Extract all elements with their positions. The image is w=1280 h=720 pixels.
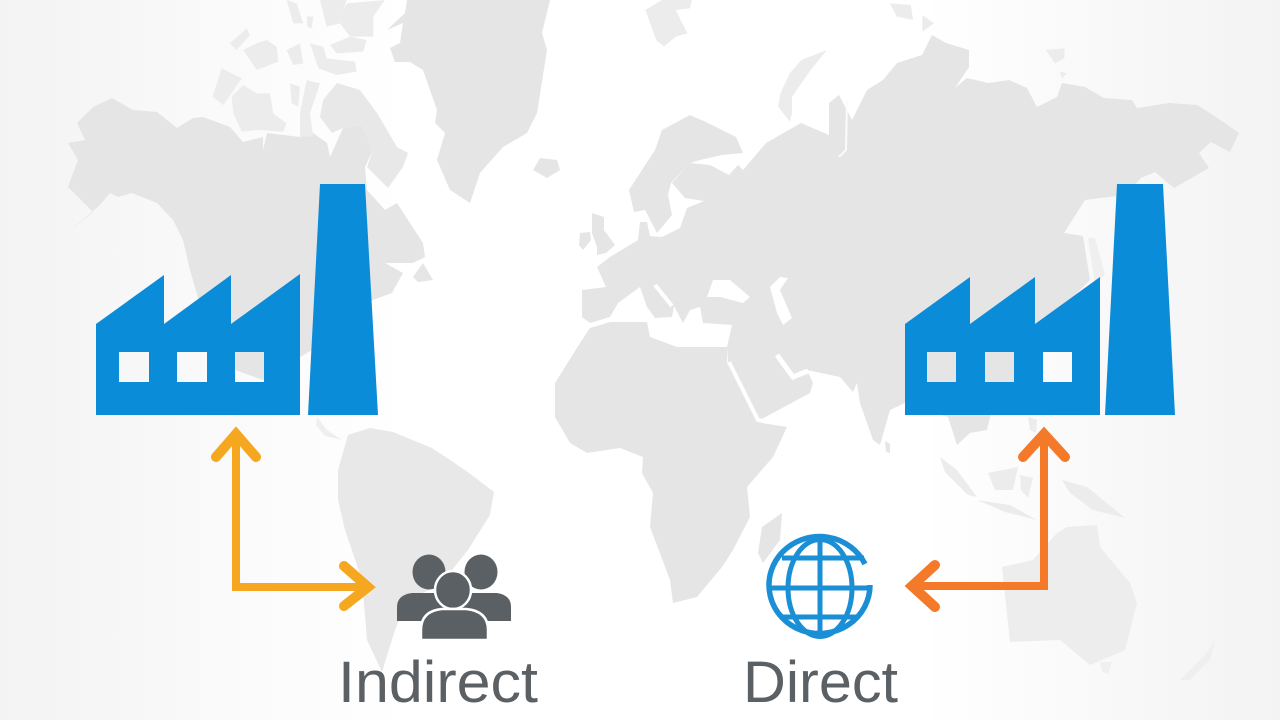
Svalbard and Arctic Russia islands bbox=[645, 0, 1067, 122]
Australia bbox=[1002, 525, 1137, 665]
Madagascar bbox=[758, 513, 782, 563]
Tasmania bbox=[1100, 662, 1112, 674]
South America bbox=[338, 428, 494, 672]
Japan bbox=[1088, 238, 1105, 285]
Newfoundland bbox=[413, 263, 433, 282]
Greenland bbox=[387, 0, 550, 203]
left factory bbox=[96, 184, 378, 415]
label: Direct: Direct bbox=[743, 650, 898, 715]
New Zealand bbox=[1180, 640, 1215, 680]
Southeast Asia islands bbox=[940, 417, 1125, 520]
Scandinavia bbox=[629, 115, 743, 233]
Red Sea bbox=[729, 362, 785, 424]
icon: people bbox=[397, 554, 511, 640]
factory building bbox=[905, 277, 1100, 415]
Central America bbox=[316, 417, 342, 440]
label: Indirect: Indirect bbox=[338, 650, 538, 715]
Great Britain bbox=[592, 213, 615, 255]
factory building bbox=[96, 274, 300, 415]
Canadian Arctic islands bbox=[213, 0, 385, 137]
Black Sea, Caspian and inlets bbox=[655, 100, 847, 377]
Africa bbox=[555, 322, 787, 603]
Eurasia bbox=[582, 35, 1239, 445]
Iceland bbox=[533, 158, 560, 178]
Ireland bbox=[579, 232, 591, 250]
North America bbox=[67, 98, 425, 380]
Sri Lanka bbox=[885, 441, 890, 453]
chimney bbox=[308, 184, 378, 415]
chimney bbox=[1105, 184, 1175, 415]
right factory bbox=[905, 184, 1175, 415]
Baffin and Quebec land bbox=[320, 83, 408, 188]
arrow: indirect bbox=[216, 434, 368, 606]
icon: globe bbox=[769, 537, 872, 637]
arrow: direct bbox=[912, 434, 1065, 607]
